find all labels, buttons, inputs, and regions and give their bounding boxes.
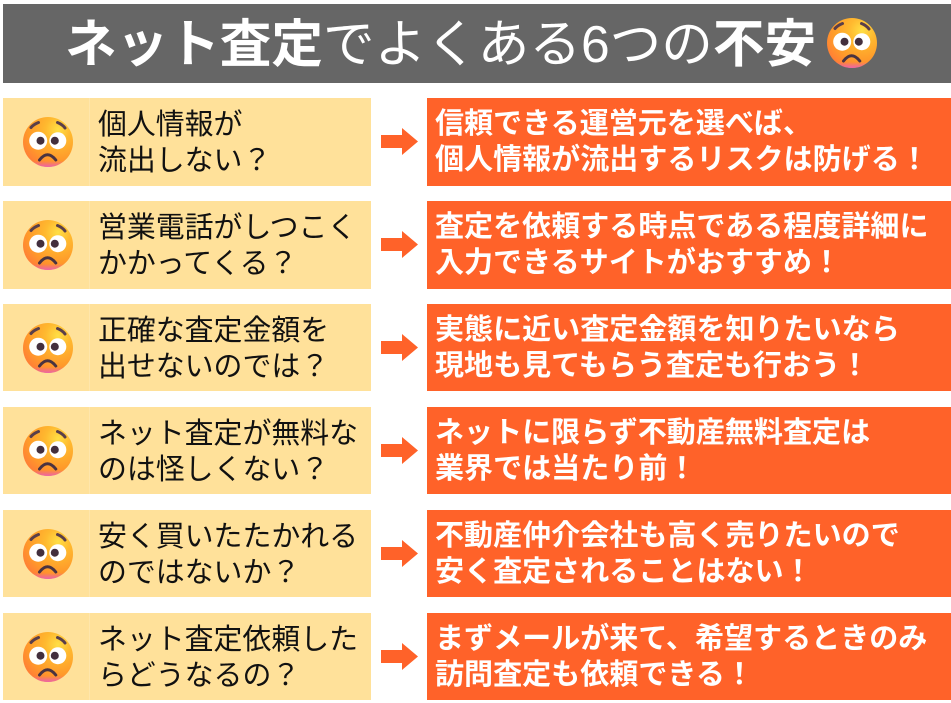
row 6 answer panel bbox=[427, 613, 951, 700]
question text: 安く買いたたかれる bbox=[98, 521, 358, 553]
row 1 answer panel bbox=[427, 98, 951, 186]
question text bbox=[98, 212, 356, 280]
answer text: 訪問査定も依頼できる！ bbox=[435, 659, 754, 691]
answer text: 査定を依頼する時点である程度詳細に bbox=[435, 211, 929, 243]
answer text: 不動産仲介会社も高く売りたいので bbox=[435, 520, 900, 552]
answer text bbox=[435, 417, 870, 485]
question text: のではないか？ bbox=[98, 557, 300, 589]
row 3 answer panel bbox=[427, 304, 951, 391]
arrow bbox=[381, 128, 418, 155]
icon: worried face bbox=[23, 323, 73, 373]
icon: worried face bbox=[23, 117, 73, 167]
answer text bbox=[435, 211, 929, 279]
answer text bbox=[435, 314, 900, 382]
icon: worried face bbox=[23, 529, 73, 579]
question text: 正確な査定金額を bbox=[98, 315, 329, 347]
row 6 question panel bbox=[3, 613, 371, 700]
title banner bbox=[3, 4, 951, 83]
icon: worried face in title bbox=[827, 18, 877, 68]
question text bbox=[98, 315, 329, 383]
question text: 個人情報が bbox=[98, 109, 242, 141]
arrow bbox=[381, 334, 418, 361]
answer text: 現地も見てもらう査定も行おう！ bbox=[435, 350, 869, 382]
title text: ネット査定でよくある6つの不安 bbox=[65, 15, 816, 73]
question text: のは怪しくない？ bbox=[98, 454, 329, 486]
row 3 question panel bbox=[3, 304, 371, 391]
arrow bbox=[381, 643, 418, 670]
question text: ネット査定が無料な bbox=[98, 418, 358, 450]
question text: 流出しない？ bbox=[98, 145, 271, 177]
question text bbox=[98, 418, 358, 486]
icon: worried face bbox=[23, 220, 73, 270]
arrow bbox=[381, 540, 418, 567]
question text bbox=[98, 109, 271, 177]
arrow bbox=[381, 437, 418, 464]
question text: らどうなるの？ bbox=[98, 660, 300, 692]
row 5 question panel bbox=[3, 510, 371, 597]
answer text: 個人情報が流出するリスクは防げる！ bbox=[435, 144, 929, 176]
answer text bbox=[435, 108, 929, 176]
arrow bbox=[381, 231, 418, 258]
question text: ネット査定依頼した bbox=[98, 624, 358, 656]
question text: 出せないのでは？ bbox=[98, 351, 329, 383]
row 4 question panel bbox=[3, 407, 371, 494]
answer text bbox=[435, 520, 900, 588]
answer text: 信頼できる運営元を選べば、 bbox=[435, 108, 812, 140]
question text: 営業電話がしつこく bbox=[98, 212, 356, 244]
row 2 question panel bbox=[3, 201, 371, 289]
answer text: 入力できるサイトがおすすめ！ bbox=[435, 247, 841, 279]
icon: worried face bbox=[23, 632, 73, 682]
answer text: 業界では当たり前！ bbox=[435, 453, 696, 485]
row 5 answer panel bbox=[427, 510, 951, 597]
row 2 answer panel bbox=[427, 201, 951, 289]
question text bbox=[98, 624, 358, 692]
question text bbox=[98, 521, 358, 589]
answer text: 安く査定されることはない！ bbox=[435, 556, 813, 588]
row 4 answer panel bbox=[427, 407, 951, 494]
answer text: ネットに限らず不動産無料査定は bbox=[435, 417, 870, 449]
question text: かかってくる？ bbox=[98, 248, 297, 280]
answer text: 実態に近い査定金額を知りたいなら bbox=[435, 314, 900, 346]
answer text bbox=[435, 622, 927, 691]
answer text: まずメールが来て、希望するときのみ bbox=[435, 623, 927, 655]
row 1 question panel bbox=[3, 98, 371, 186]
icon: worried face bbox=[23, 426, 73, 476]
